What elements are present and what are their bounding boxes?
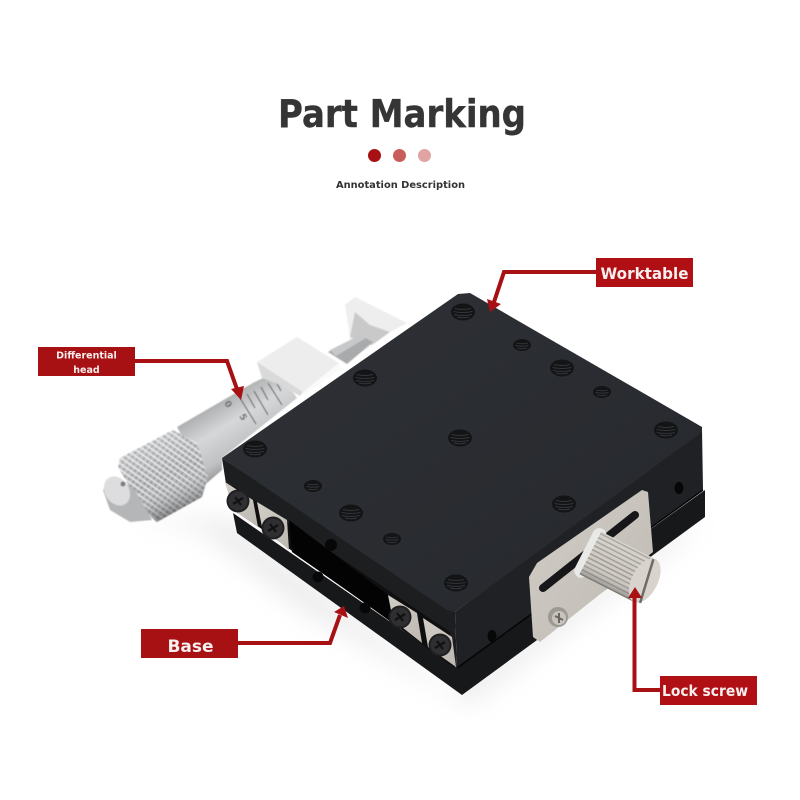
upper plate right face [455,429,703,668]
callout: base: Base [167,637,214,657]
lock screw knob [572,526,669,611]
callout: worktable: Worktable [600,264,689,283]
decorative dots row [368,149,431,162]
callout: differential head: Differential [56,350,117,362]
differential head: 5 [236,412,248,423]
product photo: micrometer stage [99,293,705,695]
callout: base [141,606,348,658]
worktable top face [222,293,702,612]
callout: lock screw: Lock screw [662,682,748,700]
threaded holes [243,304,678,592]
recessed window [232,485,455,668]
differential head: 0 [221,399,233,410]
steel lock plate [529,490,653,642]
front clamp block [257,337,341,396]
subtitle: Annotation Description [336,180,465,191]
rear bracket and spindle [328,297,407,364]
differential head [99,373,297,522]
callout: differential head [38,347,244,400]
upper plate front face [222,458,457,668]
bracket screws [226,490,452,656]
ground shadow [125,515,700,705]
callout: worktable [487,258,693,312]
side brackets [225,482,456,667]
base holes [312,482,684,642]
base body [233,490,705,695]
callout: differential head: head [73,365,100,376]
title: Part Marking [278,92,526,136]
callout: lock screw [628,587,757,705]
